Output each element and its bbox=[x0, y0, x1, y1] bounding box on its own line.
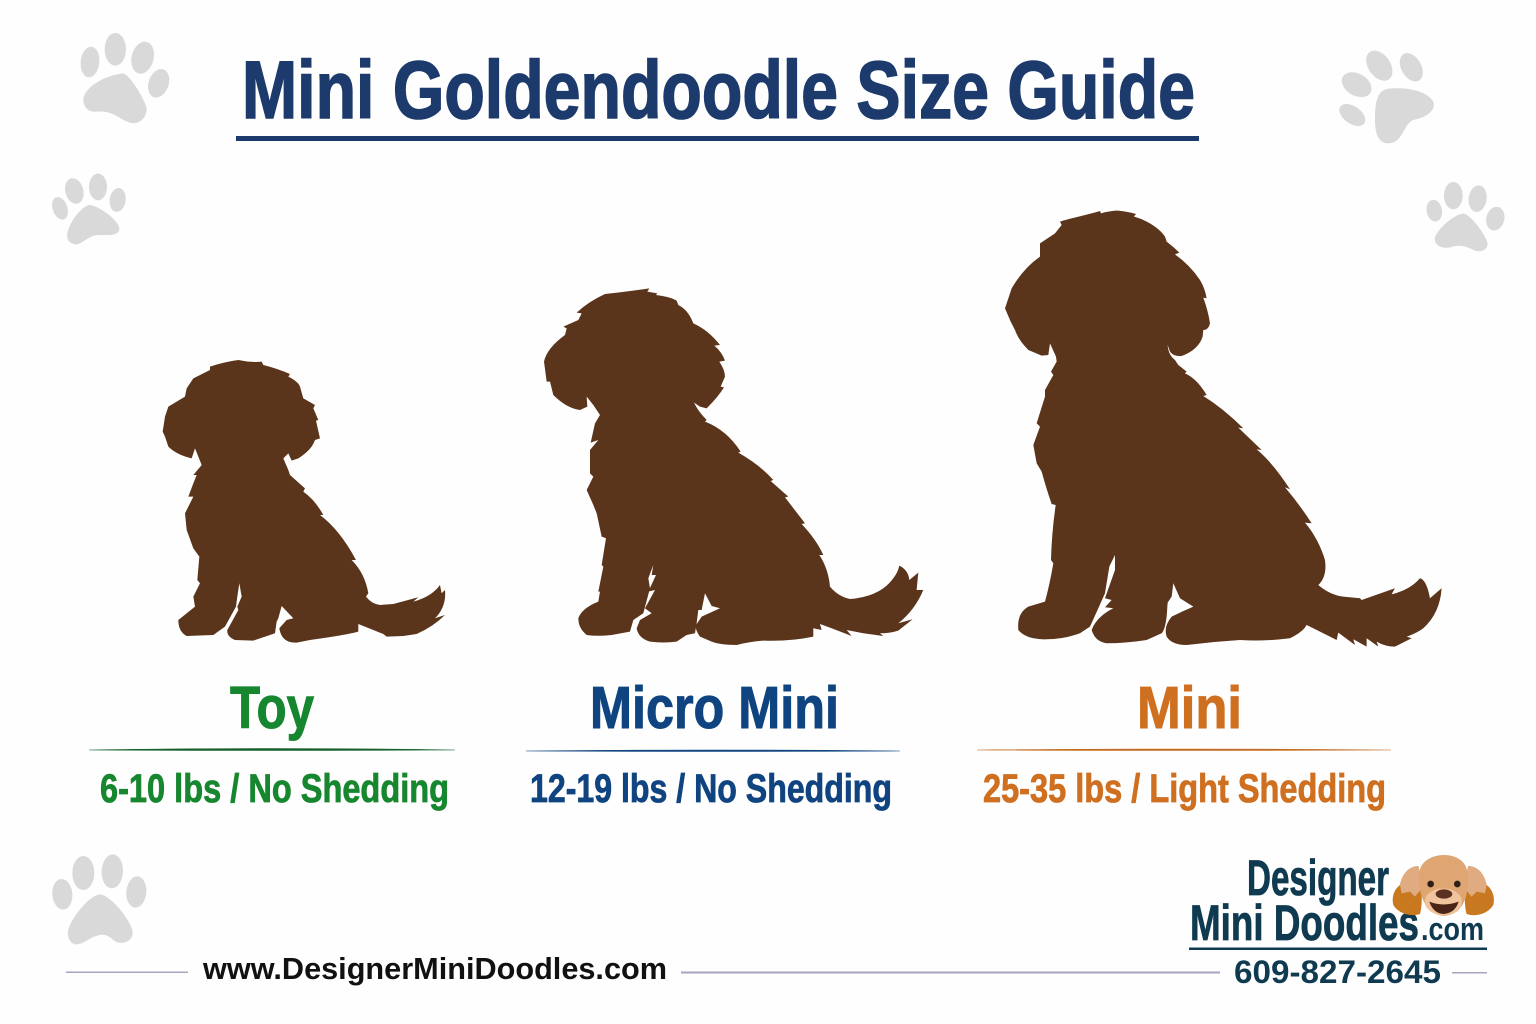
icon: paw top right bbox=[1335, 46, 1434, 143]
label: mini bbox=[977, 675, 1391, 811]
label: mini: Mini bbox=[1137, 675, 1242, 741]
footer website: www.DesignerMiniDoodles.com bbox=[202, 951, 667, 986]
footer phone: 609-827-2645 bbox=[1234, 954, 1441, 990]
icon: paw right middle bbox=[1425, 182, 1507, 251]
label: toy bbox=[89, 675, 455, 811]
label: micro mini bbox=[526, 675, 900, 811]
icon: paw left middle bbox=[49, 174, 127, 244]
label: micro mini: 12-19 lbs / No Shedding bbox=[530, 767, 892, 811]
silhouette: micro mini dog bbox=[544, 288, 923, 645]
label: toy: Toy bbox=[230, 675, 314, 741]
label: toy: 6-10 lbs / No Shedding bbox=[100, 767, 449, 811]
silhouette: mini dog bbox=[1005, 211, 1442, 647]
icon: paw bottom left bbox=[51, 854, 148, 944]
logo: Designer bbox=[1247, 850, 1389, 906]
logo: Mini Doodles bbox=[1190, 895, 1419, 951]
label: micro mini: Micro Mini bbox=[590, 675, 839, 741]
icon: dog face bbox=[1393, 855, 1494, 916]
logo bbox=[1189, 850, 1494, 951]
title: Mini Goldendoodle Size Guide bbox=[242, 45, 1195, 136]
icon: paw top left bbox=[79, 33, 173, 123]
label: mini: 25-35 lbs / Light Shedding bbox=[983, 767, 1386, 811]
logo: .com bbox=[1421, 911, 1484, 947]
silhouette: toy dog bbox=[163, 360, 445, 643]
